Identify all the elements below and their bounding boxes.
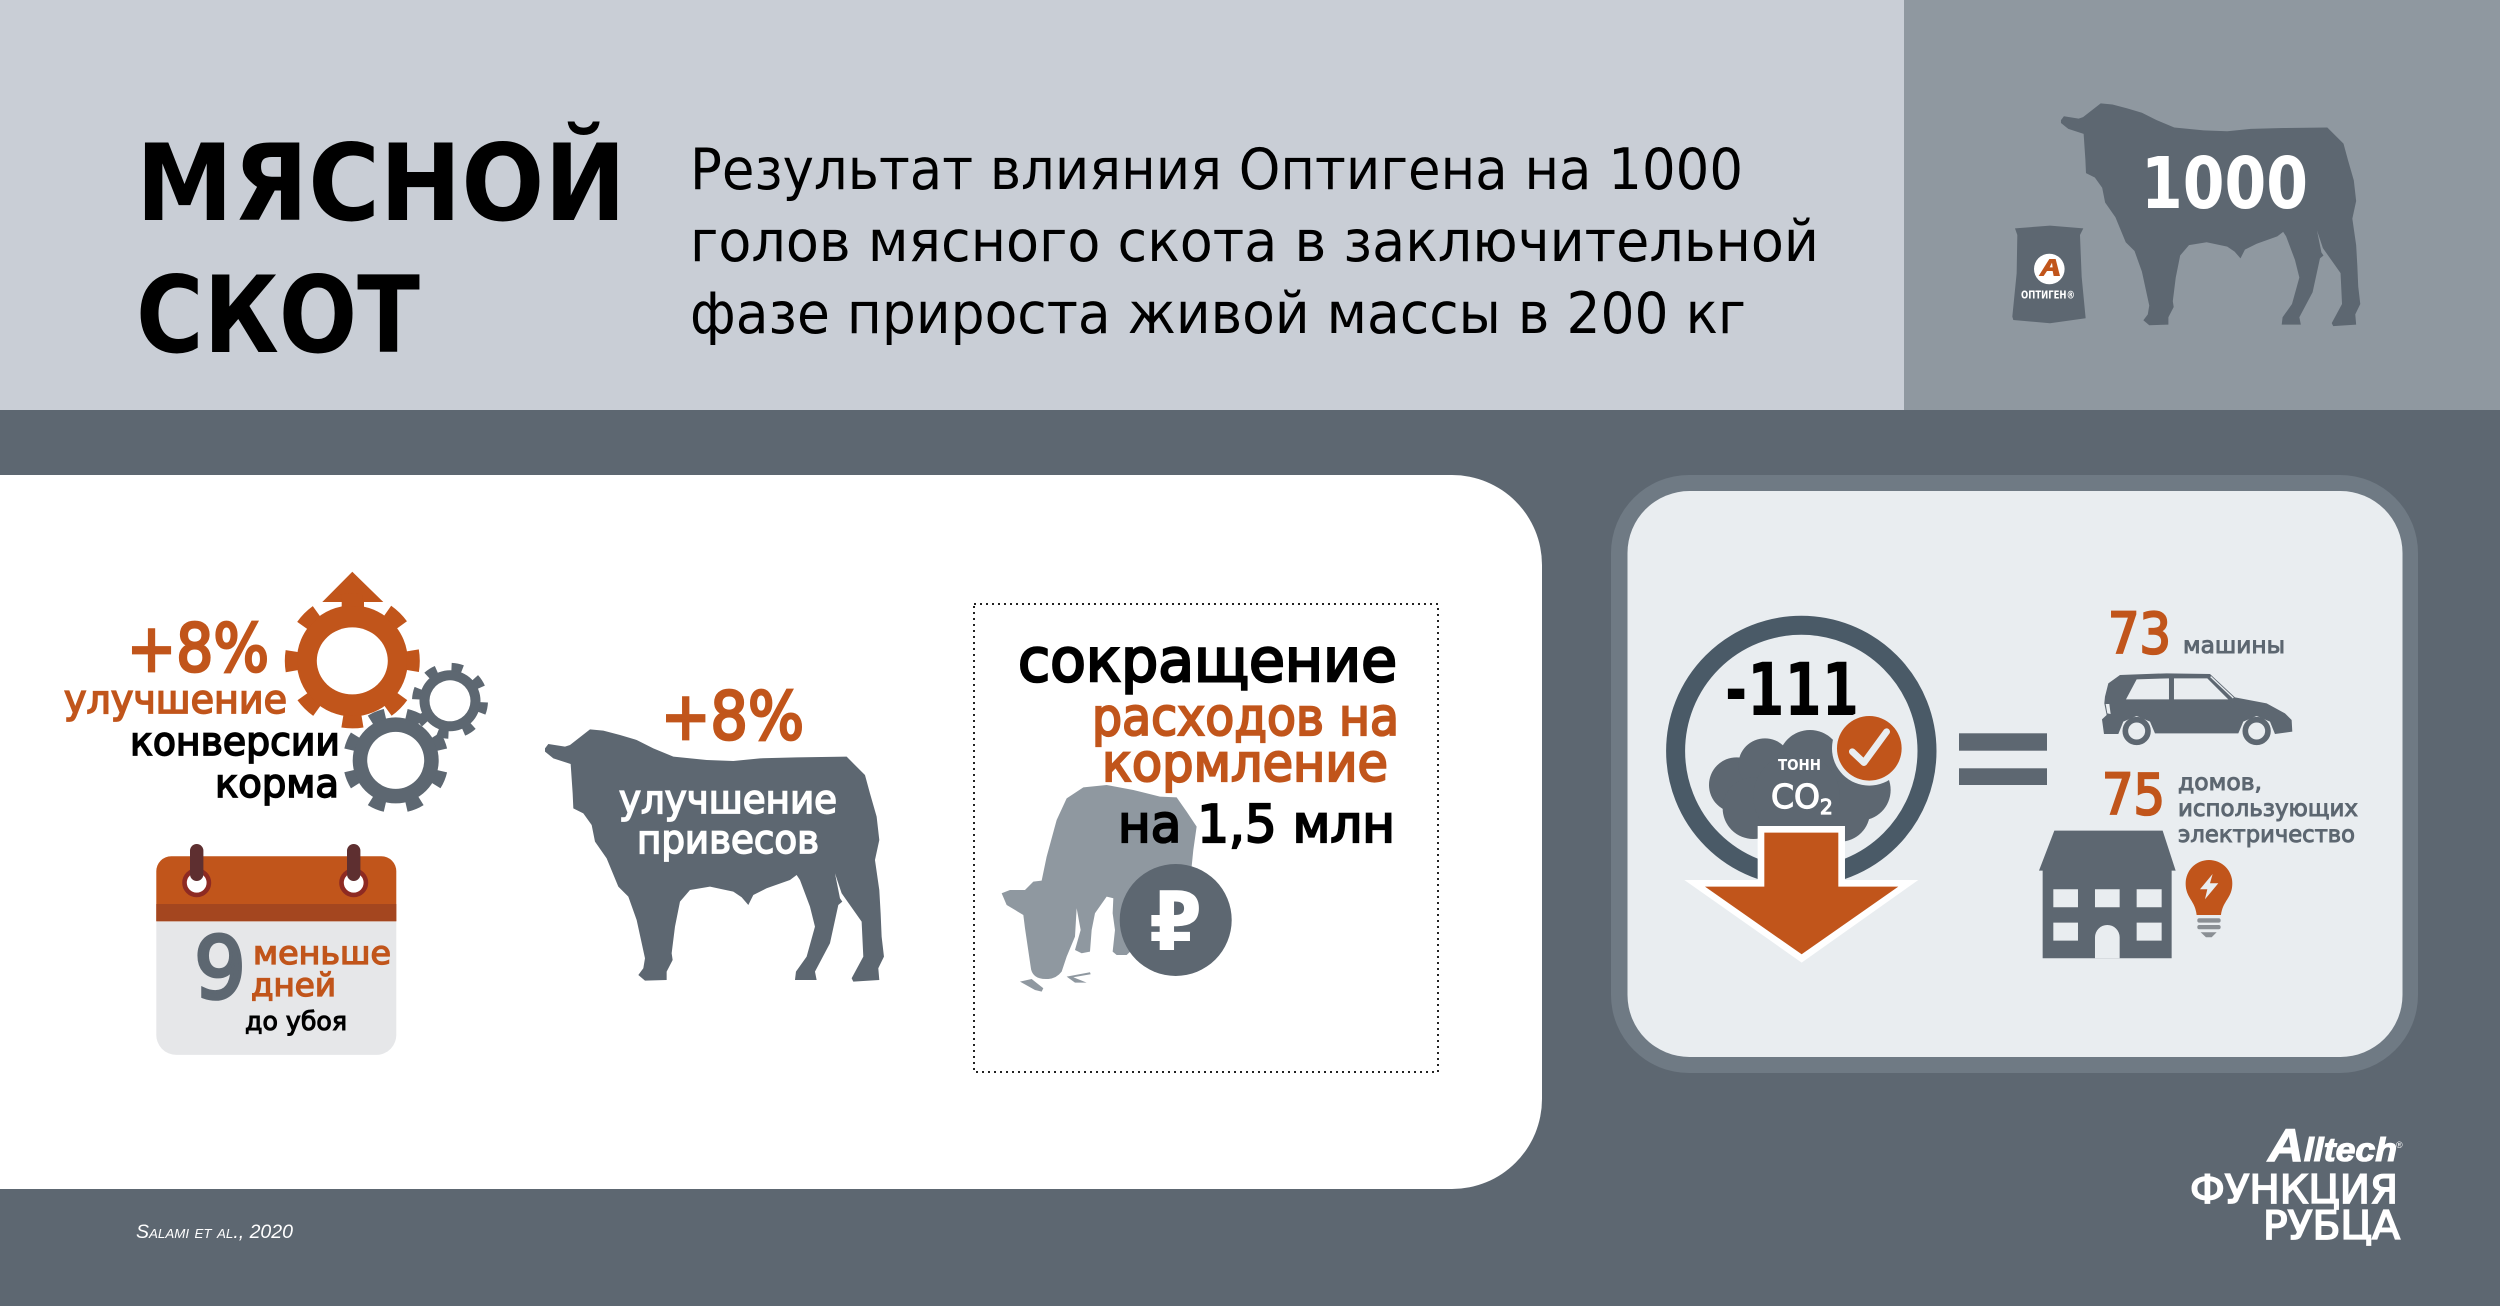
icon: CO2 circle, cloud and arrow: ТОНН	[1778, 756, 1821, 774]
icon: calendar with 9 days: меньше	[253, 934, 391, 972]
subtitle: голов мясного скота в заключительной	[690, 209, 1819, 275]
panel: results	[0, 475, 1542, 1189]
icon: calendar with 9 days: дней	[251, 966, 336, 1004]
stat: homes: электричество	[2178, 822, 2355, 848]
subtitle: Результат влияния Оптигена на 1000	[690, 137, 1743, 203]
stat: feed conversion: улучшение	[64, 678, 287, 723]
icon: bull silhouette with 1000	[2061, 103, 2360, 326]
icon: bull silhouette with 1000: 1000	[2141, 142, 2308, 225]
stat: feed conversion: +8%	[127, 610, 269, 687]
icon: ruble coin: ₽	[1149, 875, 1202, 970]
title: СКОТ	[136, 254, 420, 377]
icon: Optigen feed bag	[2012, 226, 2086, 323]
icon: calendar with 9 days: до убоя	[245, 1007, 347, 1037]
icon: car	[2102, 673, 2292, 742]
title: МЯСНОЙ	[136, 122, 626, 245]
stat: homes: 75	[2102, 763, 2165, 828]
stat: homes	[2102, 763, 2358, 848]
stat: weight gain: привесов	[637, 818, 819, 863]
header band	[0, 0, 1904, 410]
panel: feed cost reduction: на 1,5 млн	[1118, 795, 1395, 855]
subtitle	[690, 137, 1819, 347]
logo: Alltech: Alltech	[2267, 1119, 2397, 1171]
panel: feed cost reduction: сокращение	[1018, 626, 1397, 696]
stat: cars: 73	[2108, 602, 2171, 667]
icon: Optigen feed bag: ОПТИГЕН®	[2021, 290, 2075, 302]
stat: feed conversion: конверсии	[130, 720, 340, 765]
panel: feed cost reduction: расходов на	[1092, 688, 1399, 748]
icon: CO2 circle, cloud and arrow: CO	[1771, 777, 1820, 816]
subtitle: фазе прироста живой массы в 200 кг	[690, 281, 1746, 347]
icon: large grey gear	[334, 698, 458, 822]
icon: equals sign	[1959, 733, 2047, 785]
icon: CO2 circle, cloud and arrow: -111	[1725, 648, 1859, 733]
stat: cars	[2108, 602, 2285, 667]
icon: CO2 circle, cloud and arrow	[1676, 625, 1927, 963]
stat: weight gain: +8%	[661, 678, 804, 755]
stat: homes: домов,	[2178, 770, 2262, 796]
stat: feed conversion: корма	[215, 762, 339, 807]
panel: carbon footprint	[1611, 475, 2418, 1073]
icon: house	[2039, 831, 2176, 958]
panel: feed cost reduction: кормление	[1102, 734, 1388, 794]
title	[136, 122, 626, 377]
icon: light bulb	[2186, 860, 2232, 937]
brand text	[2190, 1168, 2400, 1249]
icon: calendar with 9 days: 9	[194, 919, 246, 1019]
logo: registered mark: ®	[2396, 1140, 2403, 1150]
icon: small grey gear	[410, 660, 490, 741]
header right panel	[1904, 0, 2500, 410]
icon: cow silhouette	[545, 729, 884, 982]
icon: calendar with 9 days	[156, 844, 396, 1055]
stat: cars: машины	[2183, 633, 2285, 659]
stat: weight gain	[545, 678, 884, 982]
panel: feed cost reduction	[974, 604, 1438, 1072]
stat: homes: использующих	[2178, 796, 2358, 822]
icon: grazing cow	[1002, 785, 1197, 992]
stat: weight gain: улучшение	[619, 778, 837, 823]
icon: orange gear with arrow	[291, 572, 413, 722]
brand text: РУБЦА	[2263, 1204, 2400, 1249]
brand text: ФУНКЦИЯ	[2190, 1168, 2398, 1213]
source note: Salami et al., 2020	[136, 1222, 293, 1243]
icon: CO2 circle, cloud and arrow: 2	[1820, 795, 1833, 819]
icon: ruble coin	[1120, 864, 1232, 976]
stat: feed conversion	[64, 610, 340, 807]
